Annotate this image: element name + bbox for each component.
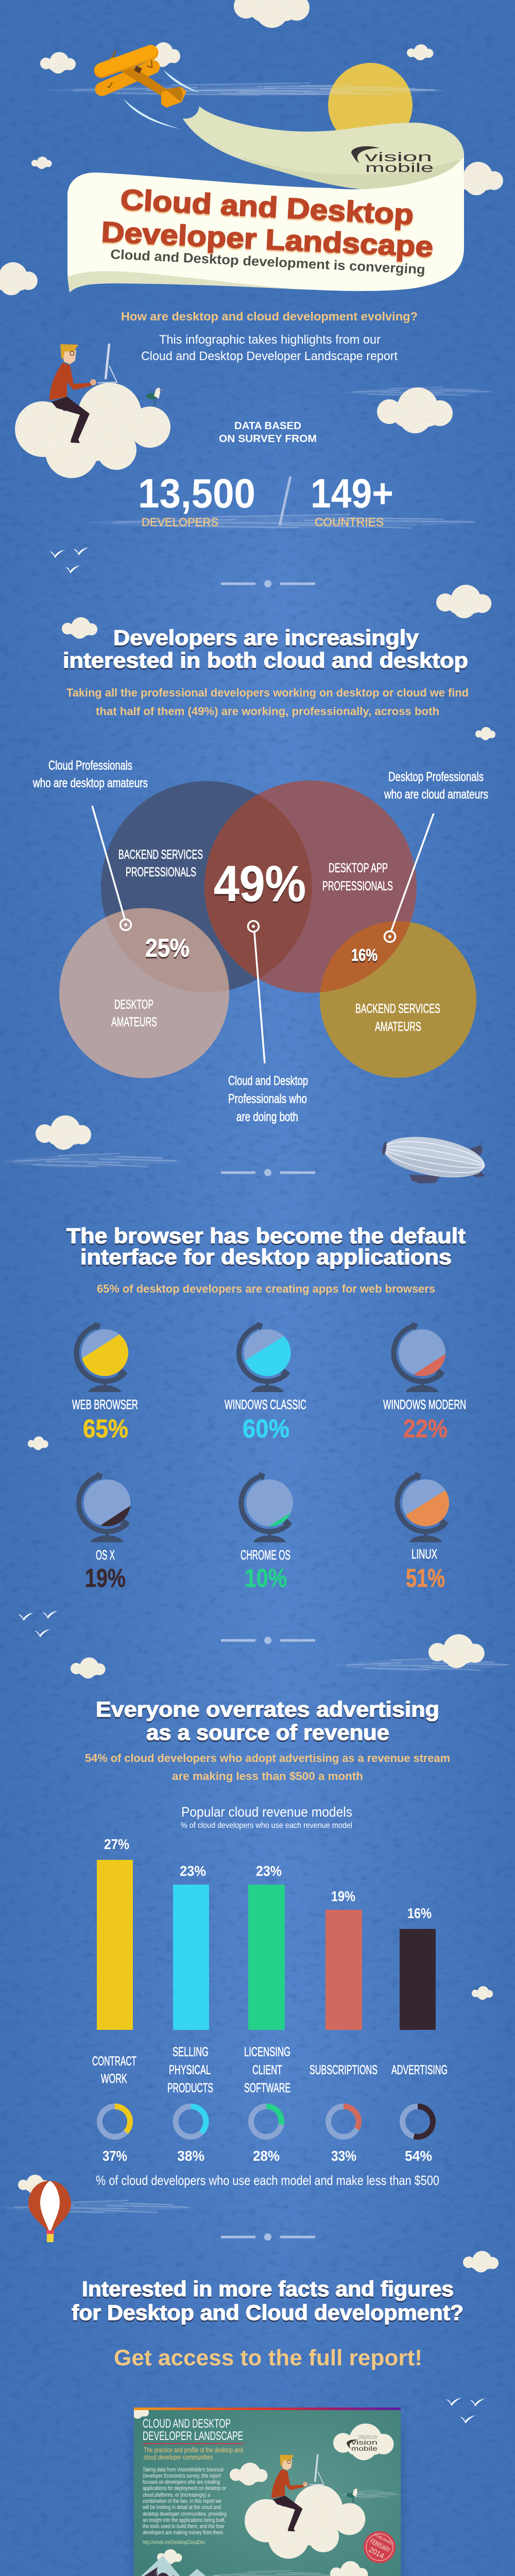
- globe: chrome os: CHROME OS: [241, 1547, 290, 1563]
- globe: os x: 19%: [85, 1564, 126, 1592]
- heading: advertising: Everyone overrates advertising: [96, 1697, 439, 1721]
- revenue model labels: PHYSICAL: [169, 2063, 211, 2077]
- venn values: 16%: [351, 945, 377, 964]
- birds: [18, 1611, 58, 1637]
- stat: countries: COUNTRIES: [315, 516, 384, 529]
- cover logo: [347, 2435, 377, 2452]
- heading: developers: [63, 625, 468, 672]
- globe: os x: [76, 1472, 131, 1587]
- callout: cloud professionals: Cloud Professionals: [48, 758, 132, 773]
- cover logo: CREATED BY: [358, 2435, 377, 2441]
- banner tail: [183, 106, 464, 189]
- venn labels: PROFESSIONALS: [322, 879, 393, 893]
- published stamp: PUBLISHED: [374, 2533, 393, 2546]
- donut: licensing client software: 28%: [253, 2148, 280, 2164]
- birds: [49, 547, 89, 573]
- gradient strip: [134, 2408, 401, 2410]
- revenue model labels: ADVERTISING: [391, 2063, 448, 2077]
- developers subheading: that half of them (49%) are working, professionally, across both: [96, 705, 439, 718]
- heading: more facts: [72, 2277, 464, 2325]
- report cover: [126, 2405, 401, 2576]
- cover body text: Developer Economics survey, this report: [143, 2473, 221, 2479]
- streak and cloud: [0, 2175, 195, 2213]
- chart title: [181, 1804, 352, 1830]
- heading: browser: interface for desktop applications: [80, 1245, 452, 1269]
- globe: linux: [394, 1472, 449, 1587]
- advertising subheading: are making less than $500 a month: [172, 1770, 363, 1783]
- cover body text: desktop developer communities, providing: [143, 2511, 227, 2517]
- cloud and streak: [0, 1115, 182, 1167]
- cover body text: developers are making money from them.: [143, 2530, 224, 2536]
- chart title: % of cloud developers who use each revenue model: [181, 1821, 352, 1830]
- published stamp: [364, 2531, 396, 2563]
- donut: licensing client software: [251, 2106, 281, 2164]
- cover logo: vision: [351, 2438, 377, 2446]
- callout: doing both: Professionals who: [228, 1092, 307, 1106]
- donut: advertising: 54%: [405, 2148, 432, 2164]
- callout: doing both: [228, 1074, 308, 1124]
- donut: subscriptions: [329, 2106, 358, 2164]
- venn values: 25%: [145, 934, 190, 962]
- cover title: CLOUD AND DESKTOP: [143, 2417, 231, 2431]
- survey label: ON SURVEY FROM: [219, 433, 317, 445]
- venn values: 49%: [214, 855, 306, 912]
- callout: cloud professionals: who are desktop amateurs: [32, 776, 148, 790]
- bar: licensing client software: 23%: [256, 1863, 282, 1879]
- clouds and streak: [71, 1634, 514, 1679]
- developers subheading: Taking all the professional developers working on desktop or cloud we find: [66, 686, 469, 699]
- cover title: [143, 2417, 244, 2461]
- cover body text: http://vmob.me/DesktopCloudDev: [143, 2539, 205, 2546]
- heading: advertising: [96, 1697, 439, 1744]
- sun: [328, 63, 413, 147]
- cloud: [28, 1436, 48, 1450]
- callout: cloud professionals: [32, 758, 148, 790]
- bar: advertising: 16%: [407, 1905, 432, 1921]
- globe: windows classic: WINDOWS CLASSIC: [225, 1397, 306, 1412]
- globe: windows classic: 60%: [243, 1414, 289, 1443]
- wispy streak behind stats: [82, 515, 488, 529]
- revenue model labels: CONTRACT: [92, 2054, 136, 2069]
- revenue model labels: SOFTWARE: [244, 2081, 290, 2095]
- birds: [446, 2398, 485, 2424]
- revenue model labels: SUBSCRIPTIONS: [310, 2063, 377, 2077]
- logo: vision mobile: mobile: [365, 161, 434, 175]
- donut: subscriptions: 33%: [331, 2148, 356, 2164]
- published stamp: FEBRUARY: [369, 2537, 392, 2554]
- cover body text: the tools used to build them, and the how: [143, 2523, 224, 2530]
- cover body text: applications for deployment on desktop or: [143, 2485, 226, 2492]
- cover body text: an insight into the applications being built,: [143, 2517, 226, 2523]
- stat: countries: 149+: [311, 470, 393, 516]
- globe: web browser: 65%: [83, 1414, 128, 1443]
- donut: selling physical products: [176, 2106, 206, 2164]
- cover title: cloud developer communities: [144, 2453, 213, 2461]
- title: [100, 183, 434, 263]
- survey label: DATA BASED: [234, 420, 301, 432]
- wispy streak behind plane: [43, 83, 448, 96]
- logo: vision mobile: [351, 146, 434, 175]
- heading: browser: The browser has become the default: [66, 1224, 466, 1248]
- venn diagram: [59, 781, 476, 1078]
- venn labels: BACKEND SERVICES: [355, 1002, 440, 1016]
- globe: web browser: [72, 1322, 138, 1443]
- title banner: [67, 157, 464, 293]
- slash divider: [280, 477, 290, 526]
- venn labels: [111, 848, 440, 1034]
- globe: chrome os: [238, 1472, 293, 1587]
- cover title: The practice and profile of the desktop and: [144, 2446, 243, 2454]
- globe: linux: 51%: [406, 1564, 445, 1592]
- bar: contract work: [97, 1836, 133, 2030]
- advertising subheading: 54% of cloud developers who adopt advertising as a revenue stream: [85, 1752, 450, 1765]
- callout: desktop professionals: [384, 770, 488, 802]
- globe: windows modern: WINDOWS MODERN: [383, 1397, 466, 1412]
- cover logo: mobile: [351, 2445, 377, 2452]
- cloud: [472, 1986, 493, 2000]
- cover body text: combination of the two. In this report we: [143, 2498, 221, 2504]
- venn labels: AMATEURS: [375, 1020, 421, 1034]
- venn labels: PROFESSIONALS: [126, 865, 196, 879]
- heading: more facts: for Desktop and Cloud development?: [72, 2300, 464, 2325]
- revenue model labels: SELLING: [173, 2045, 209, 2059]
- intro heading: How are desktop and cloud development evolving?: [121, 310, 418, 323]
- stat: developers: 13,500: [138, 470, 255, 516]
- subtitle: Cloud and Desktop development is converging: [110, 246, 425, 277]
- cloud right: [377, 387, 453, 433]
- pointers: [92, 806, 434, 1063]
- logo: vision mobile: vision: [365, 150, 432, 164]
- bar: subscriptions: 19%: [331, 1888, 355, 1904]
- clouds section 2: [62, 585, 495, 740]
- stat: developers: DEVELOPERS: [142, 516, 218, 529]
- globe: chrome os: 10%: [245, 1564, 287, 1592]
- survey label: [219, 420, 317, 445]
- callout: doing both: are doing both: [236, 1110, 298, 1124]
- bar: licensing client software: [248, 1863, 285, 2030]
- developer on cloud: [15, 344, 170, 478]
- revenue model labels: CLIENT: [252, 2063, 282, 2077]
- globe: windows modern: [383, 1322, 466, 1443]
- revenue model labels: WORK: [101, 2072, 127, 2086]
- callout: doing both: Cloud and Desktop: [228, 1074, 308, 1088]
- revenue model labels: LICENSING: [244, 2045, 290, 2059]
- callout: desktop professionals: Desktop Professionals: [388, 770, 484, 784]
- donut caption: % of cloud developers who use each model and make less than $500: [96, 2173, 439, 2188]
- bar: selling physical products: [173, 1863, 209, 2030]
- venn labels: BACKEND SERVICES: [118, 848, 203, 862]
- donut: advertising: [403, 2106, 433, 2164]
- globe: windows classic: [225, 1322, 306, 1443]
- developers subheading: [66, 686, 469, 718]
- wispy streak over sun: [170, 85, 445, 95]
- bar chart: [97, 1836, 436, 2030]
- cover body text: [142, 2467, 227, 2546]
- bar: advertising: [400, 1905, 436, 2030]
- biplane: [101, 50, 186, 108]
- chart title: Popular cloud revenue models: [181, 1804, 352, 1820]
- bar: selling physical products: 23%: [180, 1863, 206, 1879]
- published stamp: 2014: [368, 2545, 386, 2560]
- venn values: [145, 855, 377, 964]
- globe: windows modern: 22%: [403, 1414, 448, 1443]
- call to action: Get access to the full report!: [114, 2345, 422, 2370]
- cloud: [463, 2251, 499, 2273]
- cover body text: focuses on developers who are creating: [143, 2479, 220, 2485]
- heading: browser: [66, 1224, 466, 1269]
- heading: more facts: Interested in more facts and figures: [82, 2277, 454, 2301]
- donut: contract work: [100, 2106, 130, 2164]
- cover title: DEVELOPER LANDSCAPE: [143, 2429, 243, 2443]
- background clouds: [0, 0, 503, 295]
- cover body text: will be looking in detail at the cloud and: [142, 2504, 221, 2511]
- heading: developers: interested in both cloud and desktop: [63, 648, 468, 672]
- intro text: [141, 333, 398, 363]
- cover body text: cloud platforms, or (increasingly) a: [143, 2492, 211, 2498]
- venn labels: AMATEURS: [111, 1015, 157, 1029]
- intro text: This infographic takes highlights from our: [159, 333, 381, 347]
- donut charts: [100, 2106, 433, 2164]
- heading: advertising: as a source of revenue: [146, 1720, 389, 1744]
- revenue model labels: [92, 2045, 448, 2095]
- advertising subheading: [85, 1752, 450, 1783]
- donut: contract work: 37%: [102, 2148, 127, 2164]
- donut: selling physical products: 38%: [177, 2148, 204, 2164]
- intro text: Cloud and Desktop Developer Landscape report: [141, 349, 398, 363]
- heading: developers: Developers are increasingly: [113, 625, 419, 650]
- browser subheading: 65% of desktop developers are creating apps for web browsers: [97, 1282, 435, 1295]
- globe: linux: LINUX: [411, 1546, 437, 1562]
- globe: os x: OS X: [96, 1547, 115, 1563]
- revenue model labels: PRODUCTS: [167, 2081, 213, 2095]
- cover artwork: [126, 2405, 401, 2576]
- zeppelin: [380, 1130, 488, 1184]
- venn labels: DESKTOP APP: [329, 861, 388, 875]
- hot air balloon: [28, 2181, 71, 2242]
- venn labels: DESKTOP: [114, 997, 153, 1012]
- title: Developer Landscape: [100, 215, 434, 263]
- bar: contract work: 27%: [104, 1836, 129, 1852]
- globe: web browser: WEB BROWSER: [72, 1397, 138, 1412]
- cover body text: Taking data from VisionMobile's biannual: [143, 2467, 224, 2473]
- speed lines: [124, 70, 200, 129]
- bar: subscriptions: [325, 1888, 362, 2030]
- title: Cloud and Desktop: [119, 183, 415, 231]
- wispy streak: [341, 387, 495, 396]
